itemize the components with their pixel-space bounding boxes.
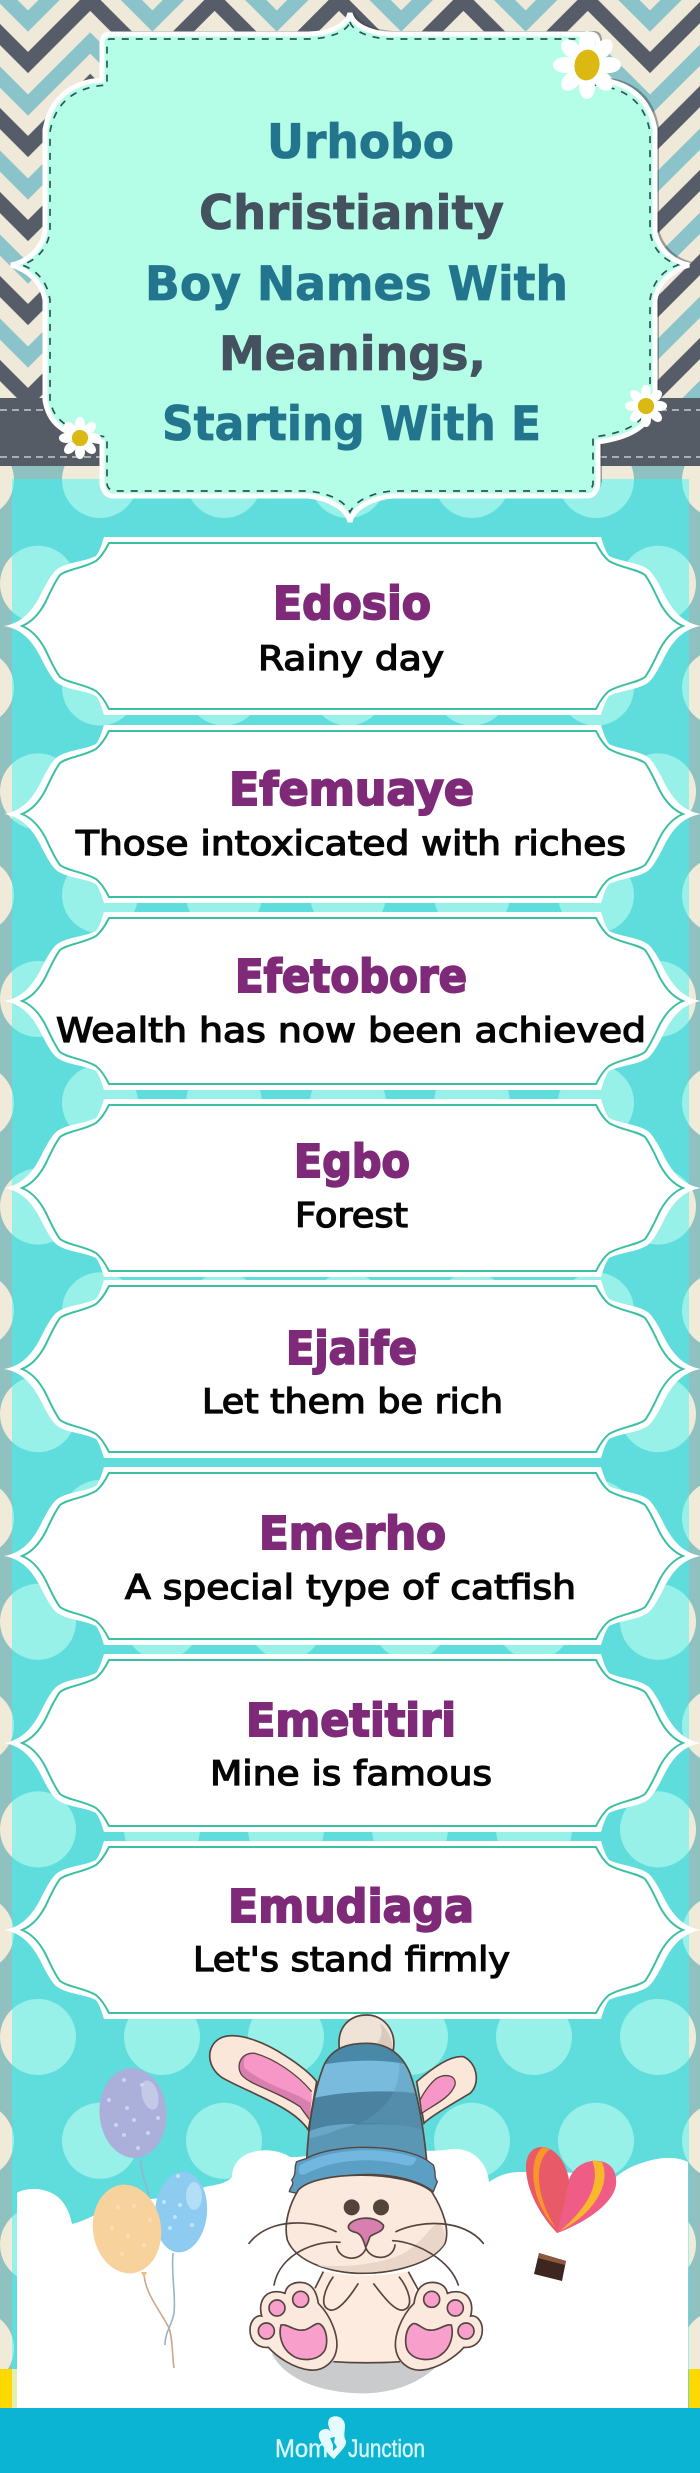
title text: Christianity xyxy=(199,186,504,241)
name card: Edosio xyxy=(4,537,700,715)
name card: Ejaife: Ejaife xyxy=(286,1322,417,1375)
name card: Emerho: A special type of catfish xyxy=(125,1568,576,1608)
icon: large daisy top right xyxy=(553,31,621,99)
pompom xyxy=(339,2015,394,2050)
title panel xyxy=(11,10,693,522)
background: teal polka dot panel xyxy=(12,479,689,2409)
basket xyxy=(534,2253,566,2281)
eyes xyxy=(344,2199,389,2215)
name card: Emetitiri: Mine is famous xyxy=(210,1754,492,1794)
balloon strings xyxy=(141,2160,174,2368)
logo text xyxy=(275,2435,425,2463)
white clouds xyxy=(17,2149,688,2408)
hat outline xyxy=(307,2043,427,2160)
hat body stripes xyxy=(308,2044,426,2159)
logo text: Mom xyxy=(275,2435,328,2463)
name card: Efetobore xyxy=(4,912,700,1090)
name card: Ejaife: Let them be rich xyxy=(202,1382,503,1422)
right ear xyxy=(417,2057,476,2123)
left ear xyxy=(210,2036,317,2130)
title text: Urhobo xyxy=(267,115,454,170)
nose xyxy=(348,2218,383,2247)
name card: Efemuaye: Efemuaye xyxy=(229,763,474,816)
feet xyxy=(250,2282,482,2370)
logo: MomJunction xyxy=(275,2416,425,2463)
illustration: bunny with striped hat xyxy=(210,2015,483,2393)
icon: heart hot air balloon xyxy=(526,2147,616,2281)
name card: Edosio: Rainy day xyxy=(258,639,444,679)
title text xyxy=(145,115,568,452)
hat cuff xyxy=(289,2147,437,2193)
name card: Efetobore: Wealth has now been achieved xyxy=(56,1011,646,1051)
body xyxy=(313,2272,418,2363)
name card: Emudiaga: Let's stand firmly xyxy=(193,1940,510,1980)
background: dark ribbon band xyxy=(0,398,700,466)
footer bar xyxy=(0,2408,700,2473)
title text: Meanings, xyxy=(219,327,486,382)
name card: Emetitiri: Emetitiri xyxy=(246,1694,456,1747)
name card: Efemuaye: Those intoxicated with riches xyxy=(75,824,626,864)
name card: Ejaife xyxy=(4,1280,700,1458)
logo text: Junction xyxy=(348,2435,425,2463)
blue balloon xyxy=(152,2169,210,2255)
name card: Emudiaga: Emudiaga xyxy=(228,1880,474,1933)
icon: balloons xyxy=(87,2066,210,2368)
name card: Edosio: Edosio xyxy=(273,577,431,630)
background: chevron header pattern xyxy=(0,0,700,400)
name card: Emerho: Emerho xyxy=(259,1507,446,1560)
name card: Efetobore: Efetobore xyxy=(235,950,467,1003)
name card: Emetitiri xyxy=(4,1654,700,1832)
mouth and whiskers xyxy=(249,2223,483,2285)
icon: daisy left xyxy=(59,417,101,459)
name card: Emerho xyxy=(4,1467,700,1645)
title text: Starting With E xyxy=(162,397,541,452)
name card: Emudiaga xyxy=(4,1841,700,2019)
name card: Egbo: Egbo xyxy=(294,1135,410,1188)
background: side strips with cream dots xyxy=(0,466,700,2370)
icon: daisy right xyxy=(625,385,667,427)
name card: Egbo: Forest xyxy=(295,1196,408,1236)
shadow xyxy=(272,2353,447,2393)
name card: Egbo xyxy=(4,1099,700,1277)
purple balloon xyxy=(96,2066,170,2160)
title text: Boy Names With xyxy=(145,257,568,312)
logo icon xyxy=(319,2416,346,2459)
orange balloon xyxy=(87,2180,167,2278)
head xyxy=(286,2175,447,2273)
background: yellow strip corners xyxy=(0,2369,700,2408)
name card: Efemuaye xyxy=(4,725,700,903)
